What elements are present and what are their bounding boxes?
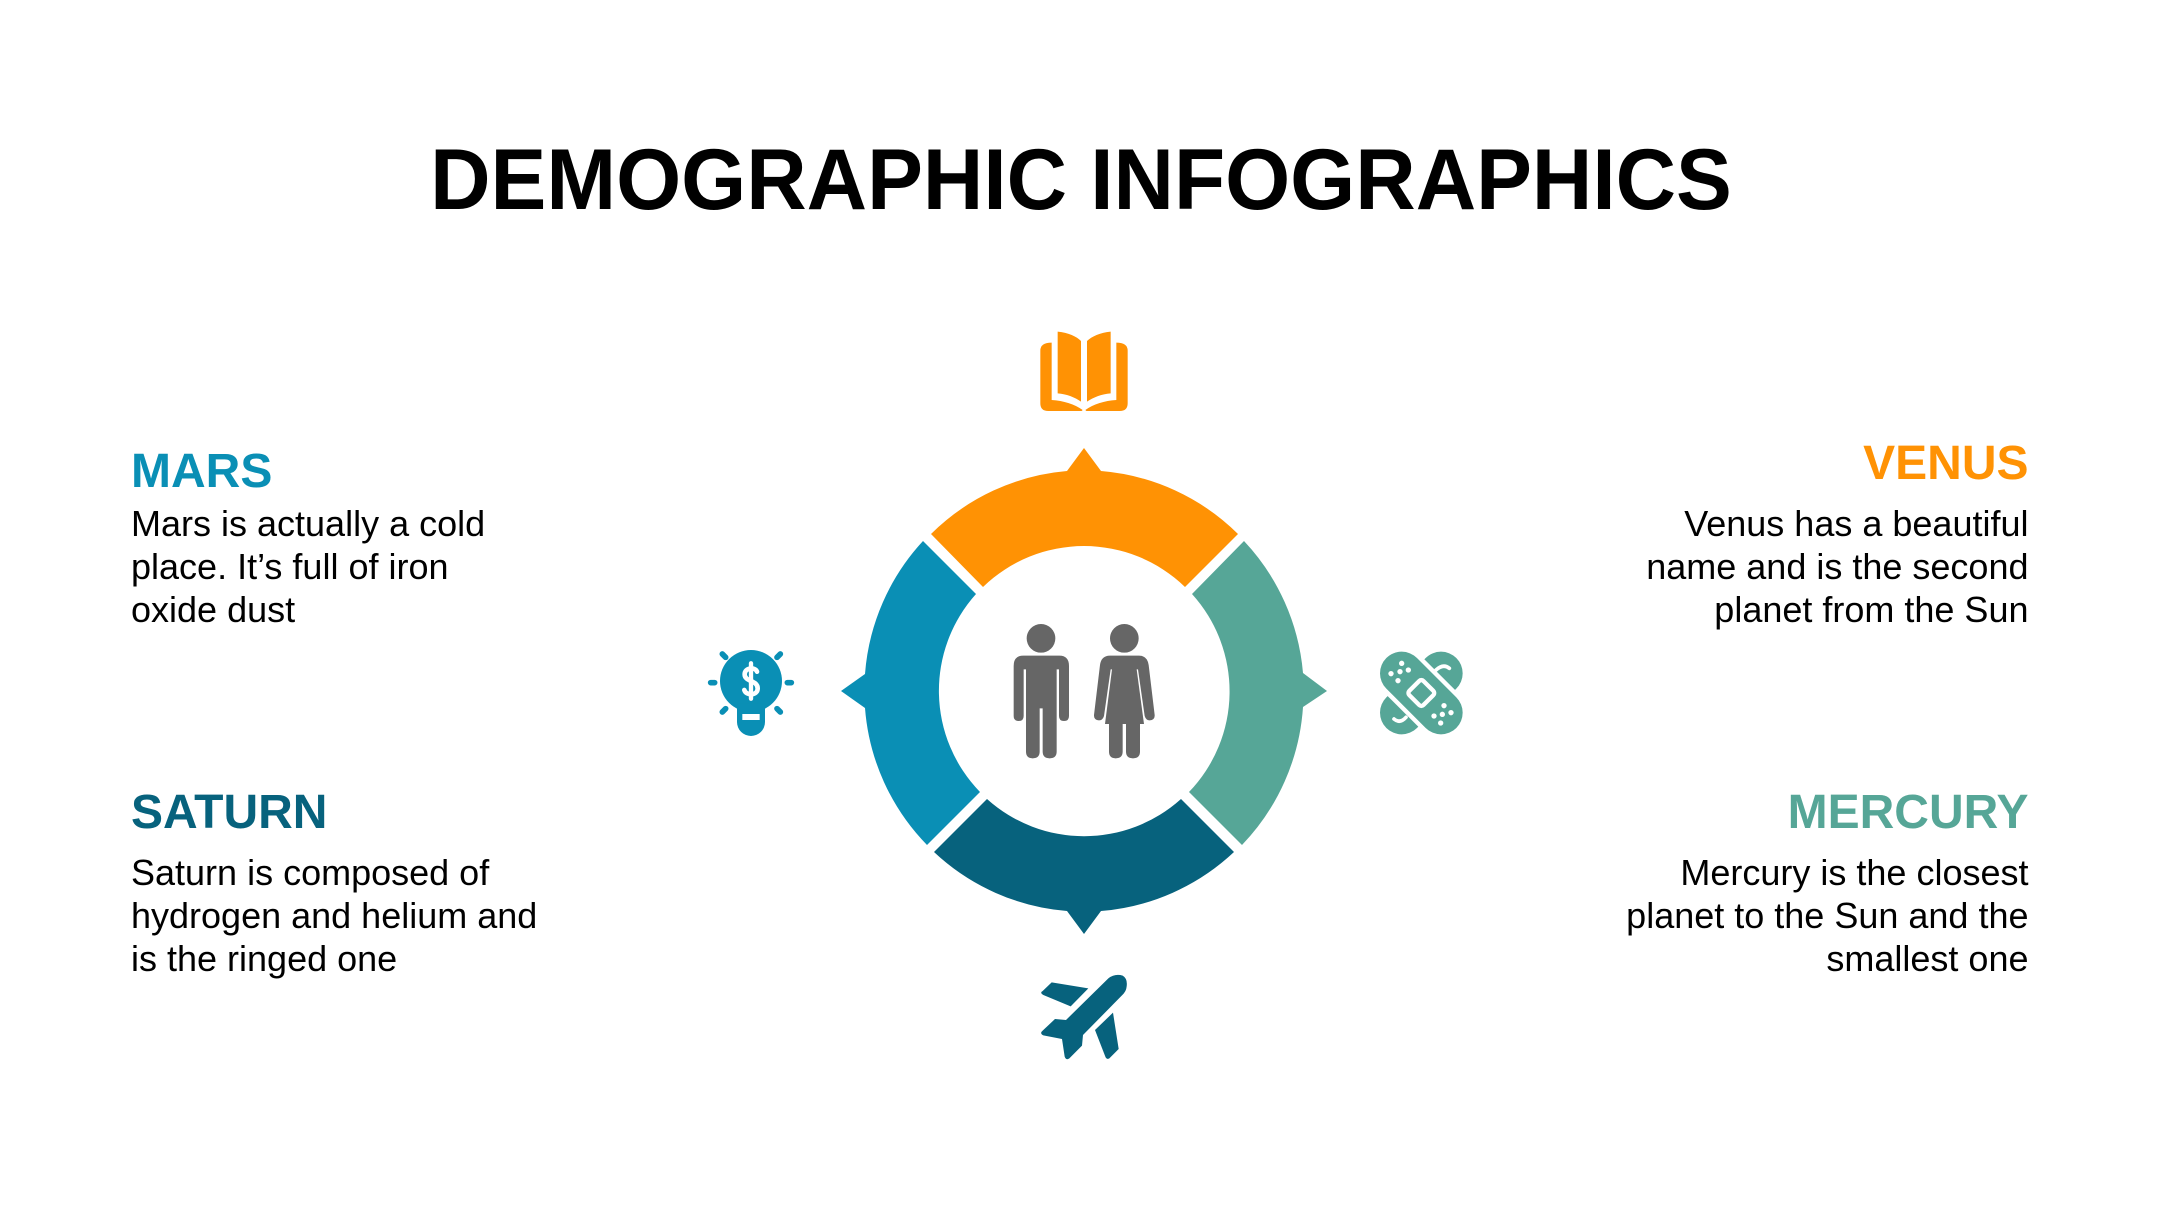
ring segment: venus: [931, 448, 1238, 587]
icon: open book: [1040, 332, 1128, 411]
icon: man and woman: [1014, 624, 1155, 758]
ring segment: mars: [841, 541, 980, 845]
panel: saturn text: [131, 786, 537, 979]
icon: crossed bandages: [1388, 661, 1454, 726]
text block: mars description: place. It’s full of iron: [131, 546, 448, 587]
text block: saturn description: hydrogen and helium and: [131, 895, 537, 936]
text block: saturn description: Saturn is composed of: [131, 852, 490, 893]
heading: saturn: SATURN: [131, 786, 327, 839]
text block: mercury description: smallest one: [1826, 938, 2028, 979]
text block: venus description: Venus has a beautiful: [1684, 503, 2028, 544]
title: DEMOGRAPHIC INFOGRAPHICS: [430, 132, 1732, 228]
heading: mars: MARS: [131, 445, 272, 498]
icon: airplane: [1041, 975, 1127, 1059]
text block: mercury description: Mercury is the closest: [1680, 852, 2028, 893]
text block: venus description: [1646, 503, 2028, 630]
text block: mars description: Mars is actually a cold: [131, 503, 485, 544]
icon: woman: [1094, 624, 1155, 758]
text block: saturn description: [131, 852, 537, 979]
heading: venus: VENUS: [1863, 437, 2028, 490]
text block: mercury description: planet to the Sun and the: [1626, 895, 2028, 936]
panel: mars text: [131, 445, 485, 630]
text block: mars description: oxide dust: [131, 589, 295, 630]
panel: venus text: [1646, 437, 2028, 630]
panel: mercury text: [1626, 786, 2028, 979]
heading: mercury: MERCURY: [1788, 786, 2028, 839]
ring segment: mercury: [1189, 541, 1327, 845]
text block: mercury description: [1626, 852, 2028, 979]
icon: man: [1014, 624, 1069, 758]
icon: light bulb with dollar sign: [711, 650, 791, 736]
text block: mars description: [131, 503, 485, 630]
text block: venus description: name and is the second: [1646, 546, 2028, 587]
text block: venus description: planet from the Sun: [1714, 589, 2028, 630]
text block: saturn description: is the ringed one: [131, 938, 397, 979]
chart: segmented ring: [841, 448, 1327, 934]
ring segment: saturn: [934, 799, 1234, 934]
